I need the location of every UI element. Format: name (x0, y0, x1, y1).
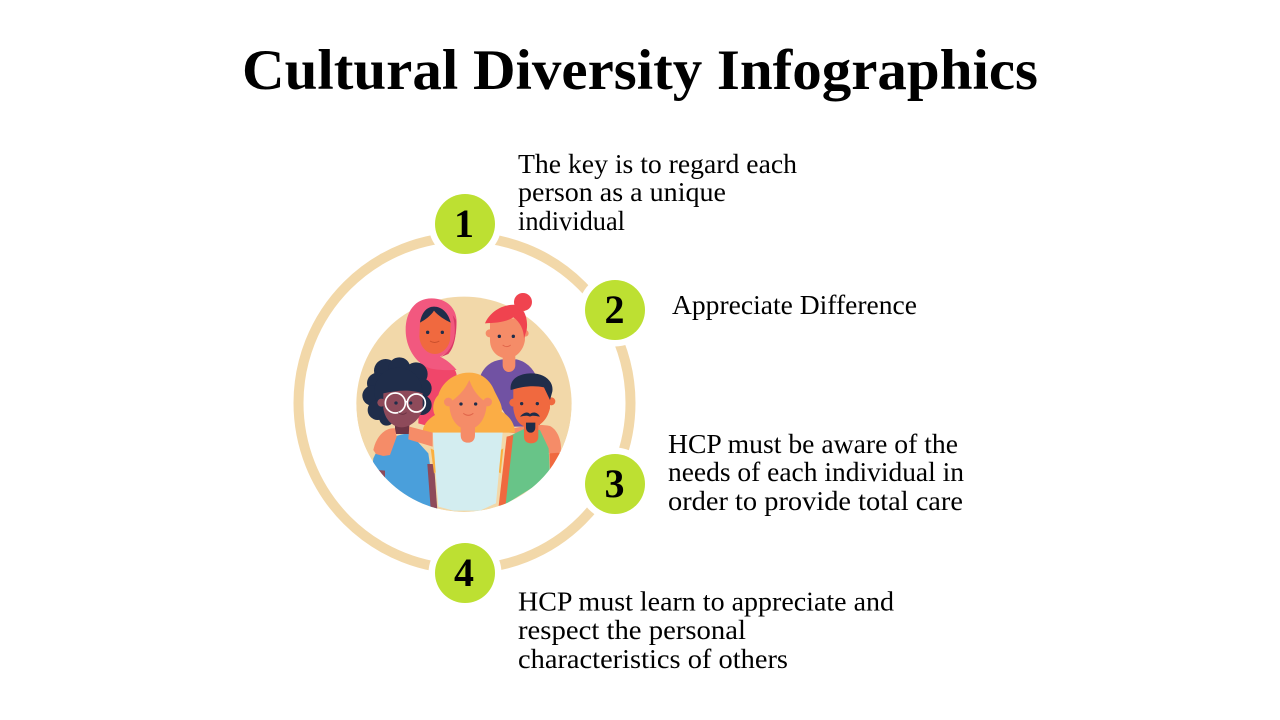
step 1 badge (428, 188, 502, 260)
blonde woman (373, 373, 515, 511)
step 3 badge: 3 (604, 461, 624, 506)
text: step 1: individual (518, 205, 625, 236)
text: step 3 (668, 428, 964, 516)
woman in hijab (406, 298, 457, 427)
step 4 badge: 4 (454, 550, 474, 595)
woman with red bun (481, 293, 540, 427)
step 2 badge: 2 (604, 287, 624, 332)
text: step 3: order to provide total care (668, 485, 963, 516)
illustration: group of diverse people (356, 293, 572, 512)
step 4 badge (428, 536, 502, 610)
text: step 3: needs of each individual in (668, 456, 964, 487)
step 3 badge (578, 448, 652, 520)
text: step 4: characteristics of others (518, 643, 788, 674)
text: step 4: HCP must learn to appreciate and (518, 586, 894, 616)
text: step 2: Appreciate Difference (672, 289, 917, 320)
text: step 4 (518, 586, 894, 674)
cycle ring (298, 237, 630, 569)
title: Cultural Diversity Infographics (242, 39, 1038, 102)
step 1 badge: 1 (454, 201, 474, 246)
text: step 3: HCP must be aware of the (668, 428, 958, 459)
man with moustache (499, 373, 561, 506)
text: step 1 (518, 148, 797, 236)
step 2 badge (578, 274, 652, 346)
text: step 1: person as a unique (518, 176, 726, 207)
text: step 1: The key is to regard each (518, 148, 797, 179)
text: step 4: respect the personal (518, 614, 746, 645)
woman with curly hair and glasses (362, 357, 437, 510)
